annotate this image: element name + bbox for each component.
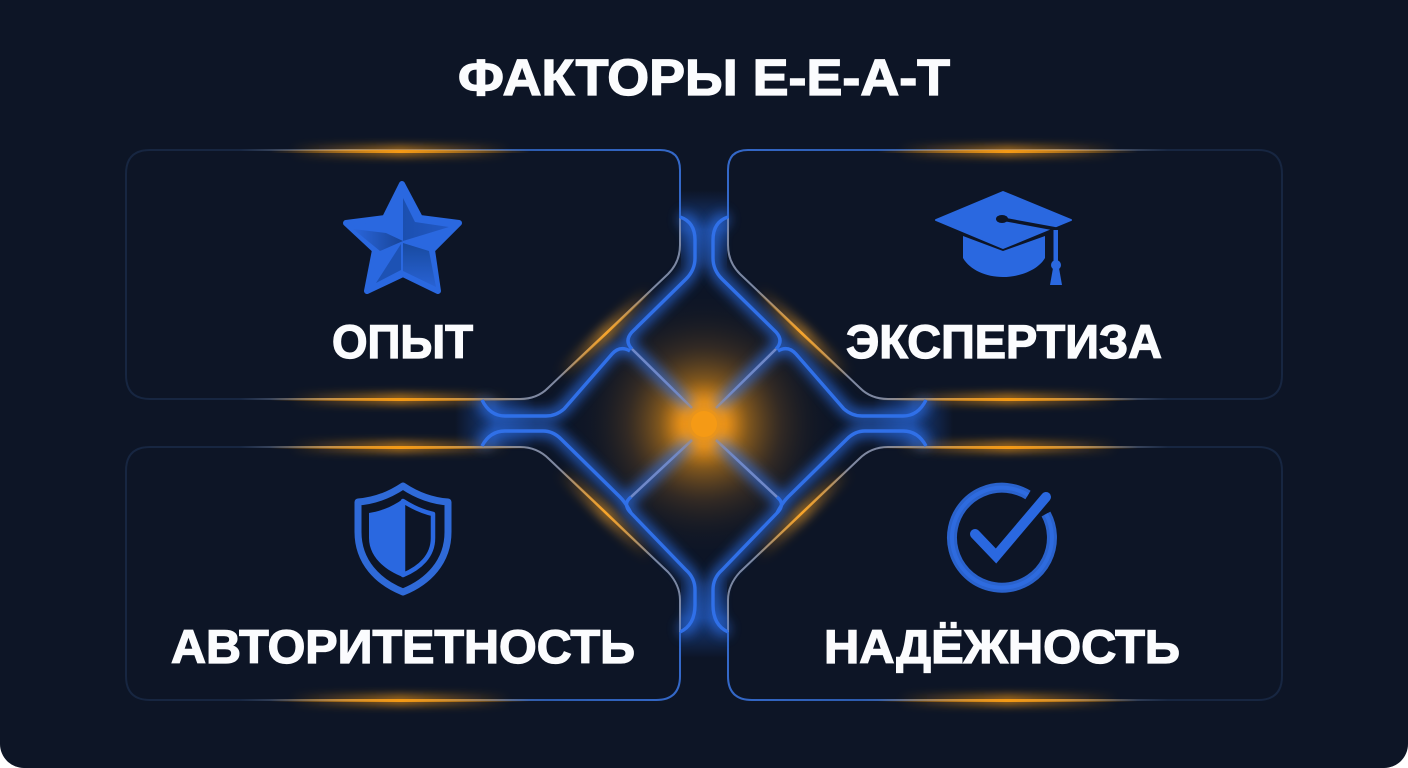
icon: shield	[358, 486, 448, 592]
central orange glow	[564, 299, 844, 549]
central node	[676, 396, 732, 452]
central blue glow bands	[455, 190, 953, 658]
panel: надёжность card outline	[713, 431, 1282, 706]
label: надёжность: НАДЁЖНОСТЬ	[824, 620, 1180, 673]
label: экспертиза: ЭКСПЕРТИЗА	[846, 315, 1162, 368]
icon: check mark circle	[952, 488, 1052, 588]
title: ФАКТОРЫ E-E-A-T	[458, 49, 950, 106]
icon: star	[346, 184, 459, 291]
icon: graduation cap	[936, 192, 1071, 285]
panel: экспертиза card outline	[713, 145, 1282, 416]
panel: опыт card outline	[126, 145, 695, 416]
label: опыт: ОПЫТ	[332, 315, 473, 368]
panel: авторитетность card outline	[126, 431, 695, 706]
label: авторитетность: АВТОРИТЕТНОСТЬ	[171, 620, 635, 673]
